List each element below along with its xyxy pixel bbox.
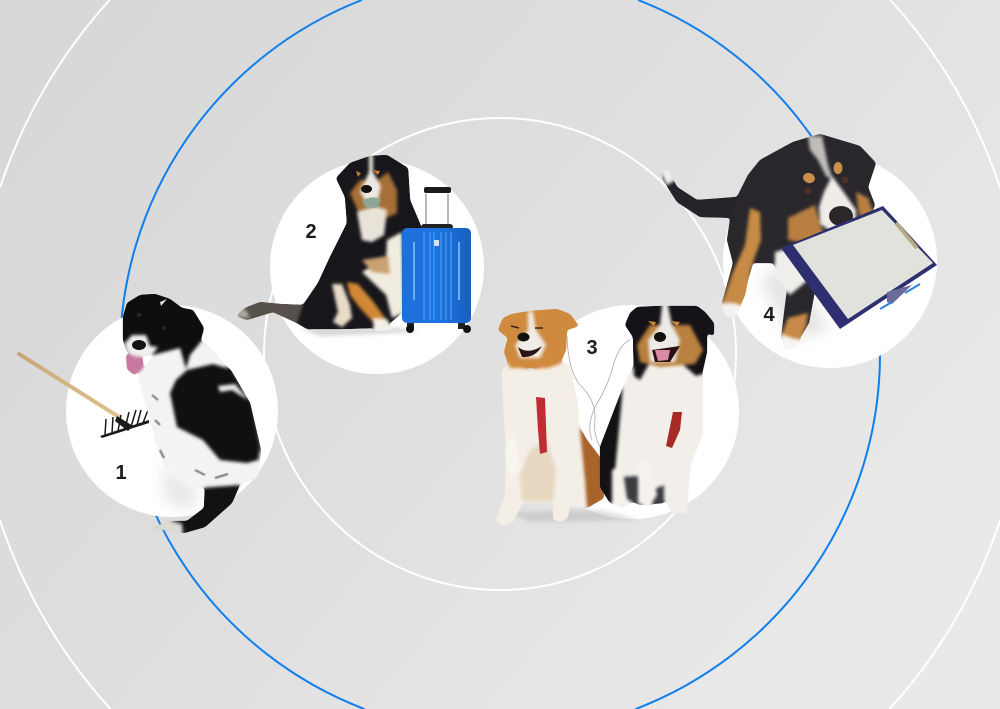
- dog 1: black and white spaniel: [123, 294, 261, 533]
- earphone wires: [567, 336, 630, 458]
- panel: step 4 circle: [723, 154, 937, 368]
- label: number 4: 4: [763, 304, 775, 326]
- dog 3 right: tricolour dog: [600, 306, 714, 513]
- dog 4: bernese puppy: [661, 134, 876, 350]
- panel: step 3 circle: [525, 305, 739, 519]
- icon: rake: [19, 354, 149, 438]
- label: number 3: 3: [586, 337, 598, 359]
- label: number 2: 2: [305, 221, 317, 243]
- dog 2: tricolour shepherd: [236, 155, 425, 336]
- icon: clipboard: [781, 206, 937, 329]
- icon: blue suitcase: [402, 187, 471, 333]
- dog 3 left: golden dog: [496, 309, 640, 526]
- panel: step 1 circle: [66, 305, 278, 517]
- label: number 1: 1: [115, 462, 127, 484]
- panel: step 2 circle: [270, 160, 484, 374]
